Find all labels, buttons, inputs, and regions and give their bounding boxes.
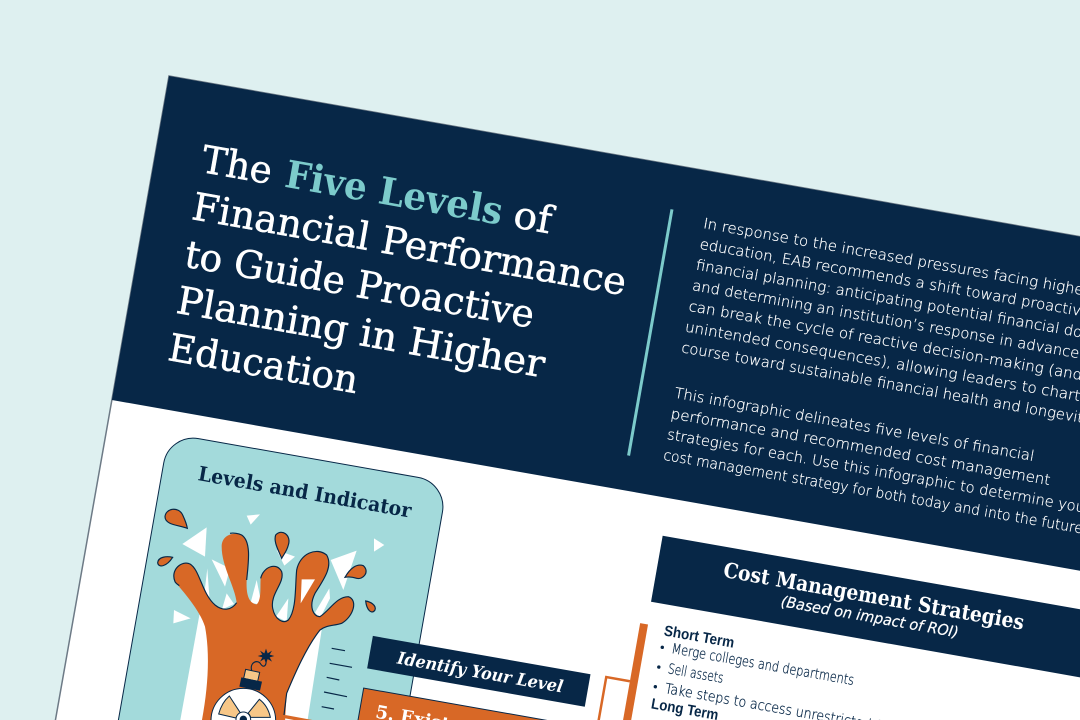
banner: identify your level bbox=[367, 636, 591, 707]
intro text: unintended consequences), allowing leaders to chart a bbox=[684, 320, 1080, 407]
intro text: In response to the increased pressures facing higher bbox=[702, 216, 1080, 300]
icon: bomb bbox=[211, 649, 276, 720]
title: Planning in Higher bbox=[173, 278, 549, 386]
banner: cost management strategies: Cost Management Strategies bbox=[722, 557, 1026, 635]
banner: cost management strategies bbox=[651, 536, 1080, 689]
strategies list: Sell assets bbox=[667, 661, 725, 687]
intro text: strategies for each. Use this infographic to determine your bbox=[666, 427, 1080, 518]
intro text bbox=[661, 216, 1080, 542]
intro text: performance and recommended cost management bbox=[669, 406, 1052, 489]
title: Education bbox=[165, 325, 362, 402]
title: Five Levels bbox=[282, 151, 506, 234]
thermometer ticks bbox=[322, 648, 352, 709]
strategies list: Short Term bbox=[663, 623, 736, 652]
level 5 box bbox=[352, 688, 581, 720]
level connector bbox=[285, 717, 367, 720]
title: of bbox=[510, 192, 558, 243]
intro text: course toward sustainable financial health and longevity. bbox=[680, 340, 1080, 429]
orange splash bbox=[174, 534, 354, 720]
strategies list: Merge colleges and departments bbox=[670, 641, 855, 689]
splash drops bbox=[158, 509, 375, 612]
white beam behind splash bbox=[180, 612, 322, 720]
connector bracket bbox=[585, 677, 630, 720]
intro text: This infographic delineates five levels of financial bbox=[673, 386, 1035, 465]
panel: levels and indicator bbox=[65, 433, 448, 720]
white shards bbox=[173, 514, 384, 623]
title: The bbox=[198, 137, 276, 193]
title bbox=[164, 136, 638, 445]
intro text: education, EAB recommends a shift toward proactive bbox=[698, 237, 1080, 321]
intro text: can break the cycle of reactive decision-making (and its bbox=[687, 299, 1080, 388]
title: Financial Performance bbox=[189, 184, 630, 304]
banner: identify your level: Identify Your Level bbox=[395, 648, 565, 698]
tilted page overlays bbox=[345, 489, 1080, 720]
title: to Guide Proactive bbox=[182, 232, 538, 337]
shard on splash bbox=[301, 579, 315, 603]
orange strategy bar bbox=[602, 623, 648, 720]
header divider line bbox=[627, 209, 673, 456]
illustration: exploding bomb splash bbox=[158, 509, 384, 720]
banner: cost management strategies: (Based on impact of ROI) bbox=[780, 592, 960, 641]
header band bbox=[112, 76, 1080, 626]
strategies list bbox=[649, 622, 921, 720]
panel heading: levels and indicator: Levels and Indicator bbox=[196, 461, 414, 523]
splash outline bbox=[174, 533, 354, 715]
